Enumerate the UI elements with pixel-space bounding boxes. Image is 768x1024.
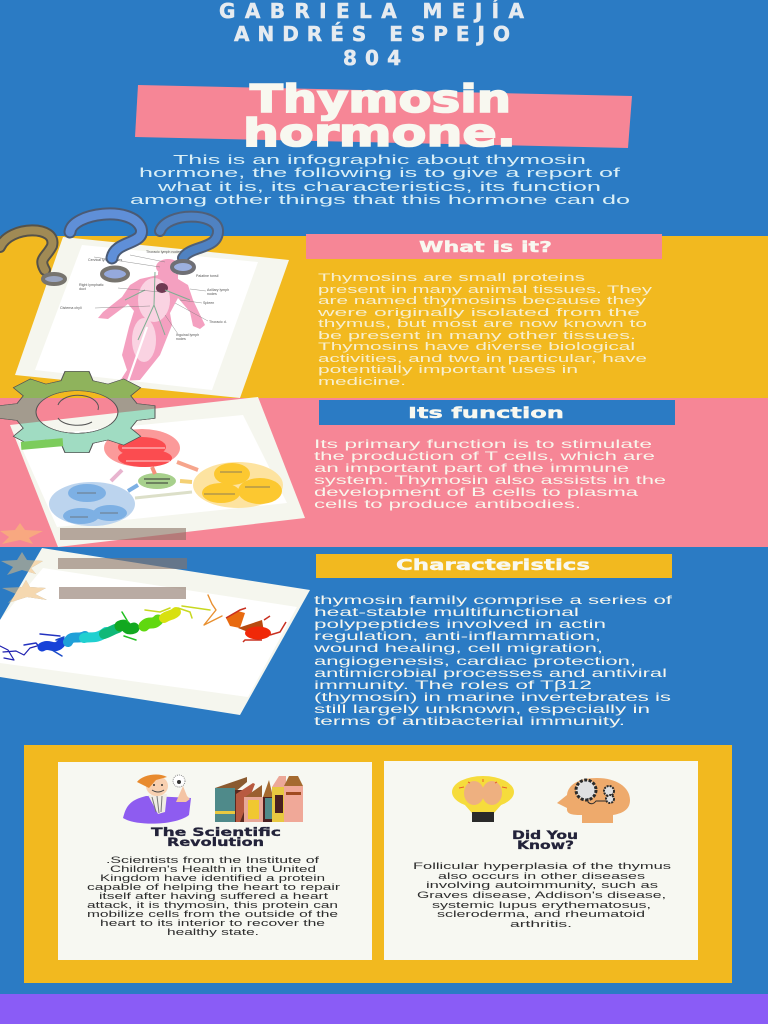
text: its function: system. Thymosin also assists in the [314, 473, 667, 487]
text: characteristics: wound healing, cell migration, [312, 641, 603, 655]
text: characteristics [312, 593, 673, 728]
card heading: Know? [517, 838, 574, 852]
text: its function [314, 437, 667, 511]
card heading: Revolution [167, 835, 264, 849]
title: Thymosin [250, 77, 511, 121]
grey placeholder bars [58, 528, 187, 599]
text: characteristics: regulation, anti-inflammation, [314, 629, 601, 643]
intro text: among other things that this hormone can do [130, 193, 630, 207]
icon: books [215, 776, 303, 822]
body labels: Thoracic lymph nodes [146, 250, 181, 254]
card text: scleroderma, and rheumatoid [437, 909, 645, 919]
card text: mobilize cells from the outside of the [87, 909, 338, 919]
author names: ANDRÉS ESPEJO [234, 22, 510, 46]
body labels: nodes [207, 292, 217, 296]
text: characteristics: still largely unknown, especially in [314, 702, 650, 716]
stars [0, 523, 47, 603]
text: characteristics: angiogenesis, cardiac protection, [314, 654, 636, 668]
text: characteristics: terms of antibacterial immunity. [314, 714, 625, 728]
intro text [130, 153, 630, 207]
icon: cartoon scientist [123, 775, 191, 824]
card text: attack, it is thymosin, this protein can [87, 900, 338, 910]
body labels [60, 250, 229, 341]
card: did you know [384, 761, 698, 960]
body labels: Right lymphatic [79, 283, 104, 287]
text: characteristics: immunity. The roles of Tβ12 [314, 678, 593, 692]
text: what is it: potentially important uses in [318, 364, 578, 376]
body figure [98, 259, 205, 381]
body labels: Cervical lymph nodes [88, 258, 123, 262]
card heading [151, 825, 281, 849]
yellow circles [193, 462, 283, 508]
text: characteristics: polypeptides involved in actin [314, 617, 606, 631]
card text: Children's Health in the United [110, 864, 316, 874]
text: what is it: are named thymosins because they [318, 295, 647, 307]
body labels: Thoracic d. [209, 320, 227, 324]
image: lymphatic body diagram [15, 237, 289, 398]
text: what is it: thymus, but most are now known to [318, 318, 647, 330]
panel: what is it band [0, 236, 768, 398]
text: what is it: Thymosins have diverse biological [318, 341, 635, 353]
panel: characteristics protein paper [0, 548, 310, 715]
red circles [104, 429, 180, 467]
card text: healthy state. [167, 927, 259, 937]
text: what is it: be present in many other tissues. [318, 330, 636, 342]
diagram arrows [177, 462, 198, 470]
footer band [0, 994, 768, 1024]
card text: Kingdom have identified a protein [100, 873, 325, 883]
text: its function: development of B cells to plasma [314, 485, 639, 499]
icon: head with gears [557, 778, 630, 823]
organs [156, 283, 168, 293]
protein chain [0, 595, 222, 660]
heading: what is it: What is it? [419, 238, 552, 256]
panel: bottom yellow container [24, 745, 732, 983]
blue circles [49, 482, 135, 526]
title: hormone. [243, 111, 516, 155]
text: characteristics: (thymosin) in marine invertebrates is [314, 690, 671, 704]
heading: what is it [306, 234, 662, 259]
body labels: Inguinal lymph [176, 333, 199, 337]
card heading [512, 828, 578, 852]
author names: 804 [343, 46, 401, 70]
body labels: nodes [176, 337, 186, 341]
author names [219, 0, 525, 70]
panel: function band [0, 398, 768, 547]
body labels: Palatine tonsil [196, 274, 219, 278]
intro text: This is an infographic about thymosin [173, 153, 586, 167]
heading: its function: Its function [408, 404, 564, 422]
body labels: Axillary lymph [207, 288, 229, 292]
text: what is it: present in many animal tissues. They [318, 284, 653, 296]
body labels: duct [79, 287, 86, 291]
text: its function: Its primary function is to stimulate [314, 437, 653, 451]
card text: heart to its interior to recover the [100, 918, 325, 928]
text: what is it: medicine. [318, 376, 406, 388]
text: what is it [316, 272, 653, 388]
image: immune diagram paper [10, 397, 305, 547]
card text: also occurs in other diseases [438, 871, 646, 881]
card text: capable of helping the heart to repair [87, 882, 340, 892]
question marks [0, 214, 218, 284]
card text: .Scientists from the Institute of [106, 855, 320, 865]
card text: itself after having suffered a heart [99, 891, 329, 901]
card text: systemic lupus erythematosus, [432, 900, 651, 910]
text: what is it: were originally isolated from the [316, 307, 640, 319]
heading: characteristics [316, 554, 672, 578]
text: characteristics: heat-stable multifunctional [314, 605, 579, 619]
title banner [135, 85, 632, 148]
icon: brain bulb [452, 776, 514, 822]
green circle [138, 473, 176, 489]
text: its function: the production of T cells, which are [314, 449, 656, 463]
card: the scientific revolution [58, 762, 372, 960]
heading: its function [319, 400, 675, 425]
card heading: Did You [512, 828, 578, 842]
text: characteristics: thymosin family comprise a series of [314, 593, 673, 607]
card text: Follicular hyperplasia of the thymus [413, 861, 672, 871]
text: what is it: Thymosins are small proteins [318, 272, 586, 284]
card text: Graves disease, Addison's disease, [417, 890, 666, 900]
text: its function: an important part of the immune [314, 461, 630, 475]
icon: gear [0, 371, 155, 453]
heading: characteristics: Characteristics [396, 556, 590, 574]
card text [87, 855, 340, 937]
card text [413, 861, 672, 929]
body labels: Spleen [203, 301, 214, 305]
text: what is it: activities, and two in particular, have [318, 353, 647, 365]
text: its function: cells to produce antibodies. [314, 497, 581, 511]
card text: arthritis. [510, 919, 572, 929]
body labels: Cisterna chyli [60, 306, 82, 310]
card heading: The Scientific [151, 825, 281, 839]
title [243, 77, 516, 155]
card text: involving autoimmunity, such as [426, 880, 659, 890]
intro text: what it is, its characteristics, its function [156, 180, 601, 194]
intro text: hormone, the following is to give a report of [139, 166, 621, 180]
text: characteristics: antimicrobial processes and antiviral [314, 666, 667, 680]
